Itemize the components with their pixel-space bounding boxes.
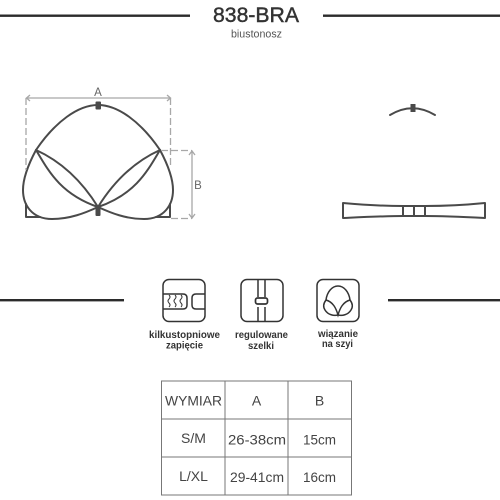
bottom corners	[26, 204, 170, 217]
size table: B	[315, 392, 324, 408]
size table: 16cm	[303, 469, 336, 485]
dimension A	[26, 87, 170, 170]
icon: adjustable straps	[241, 280, 283, 322]
size table	[162, 381, 352, 495]
bottom-section rule right	[388, 299, 500, 301]
right inner seams	[98, 150, 160, 207]
icon: neck tie	[317, 280, 359, 322]
bottom-section rule left	[0, 299, 124, 301]
left cup	[23, 150, 98, 219]
label A: A	[94, 87, 102, 99]
subtitle: biustonosz	[231, 28, 282, 40]
icon: hook closure	[163, 280, 205, 322]
left inner seams	[36, 150, 98, 207]
back neck strap diagram	[390, 105, 435, 115]
label: adjustable straps: szelki	[248, 341, 274, 352]
label: neck tie: wiązanie	[317, 329, 358, 340]
title: 838-BRA	[213, 3, 300, 27]
centre clasp	[96, 207, 100, 215]
header rule right	[323, 14, 500, 17]
label: adjustable straps: regulowane	[235, 330, 288, 341]
label: neck tie: na szyi	[322, 339, 353, 350]
neck pin	[96, 102, 100, 108]
label: hook closure: zapięcie	[166, 340, 203, 352]
label: hook closure: kilkustopniowe	[149, 330, 220, 341]
table grid	[162, 381, 352, 495]
dimension B	[161, 150, 202, 218]
size table: 15cm	[303, 432, 336, 448]
size table: L/XL	[179, 468, 208, 484]
size table: 26-38cm	[228, 432, 286, 448]
label B: B	[194, 180, 202, 192]
size table: WYMIAR	[165, 392, 222, 408]
neck strap arc	[36, 105, 160, 150]
header rule left	[0, 14, 190, 17]
back band diagram	[343, 203, 485, 218]
front bra diagram	[23, 102, 173, 219]
right cup	[98, 150, 173, 219]
size table: 29-41cm	[230, 469, 284, 485]
size table: A	[252, 392, 262, 408]
size table: S/M	[181, 430, 206, 446]
